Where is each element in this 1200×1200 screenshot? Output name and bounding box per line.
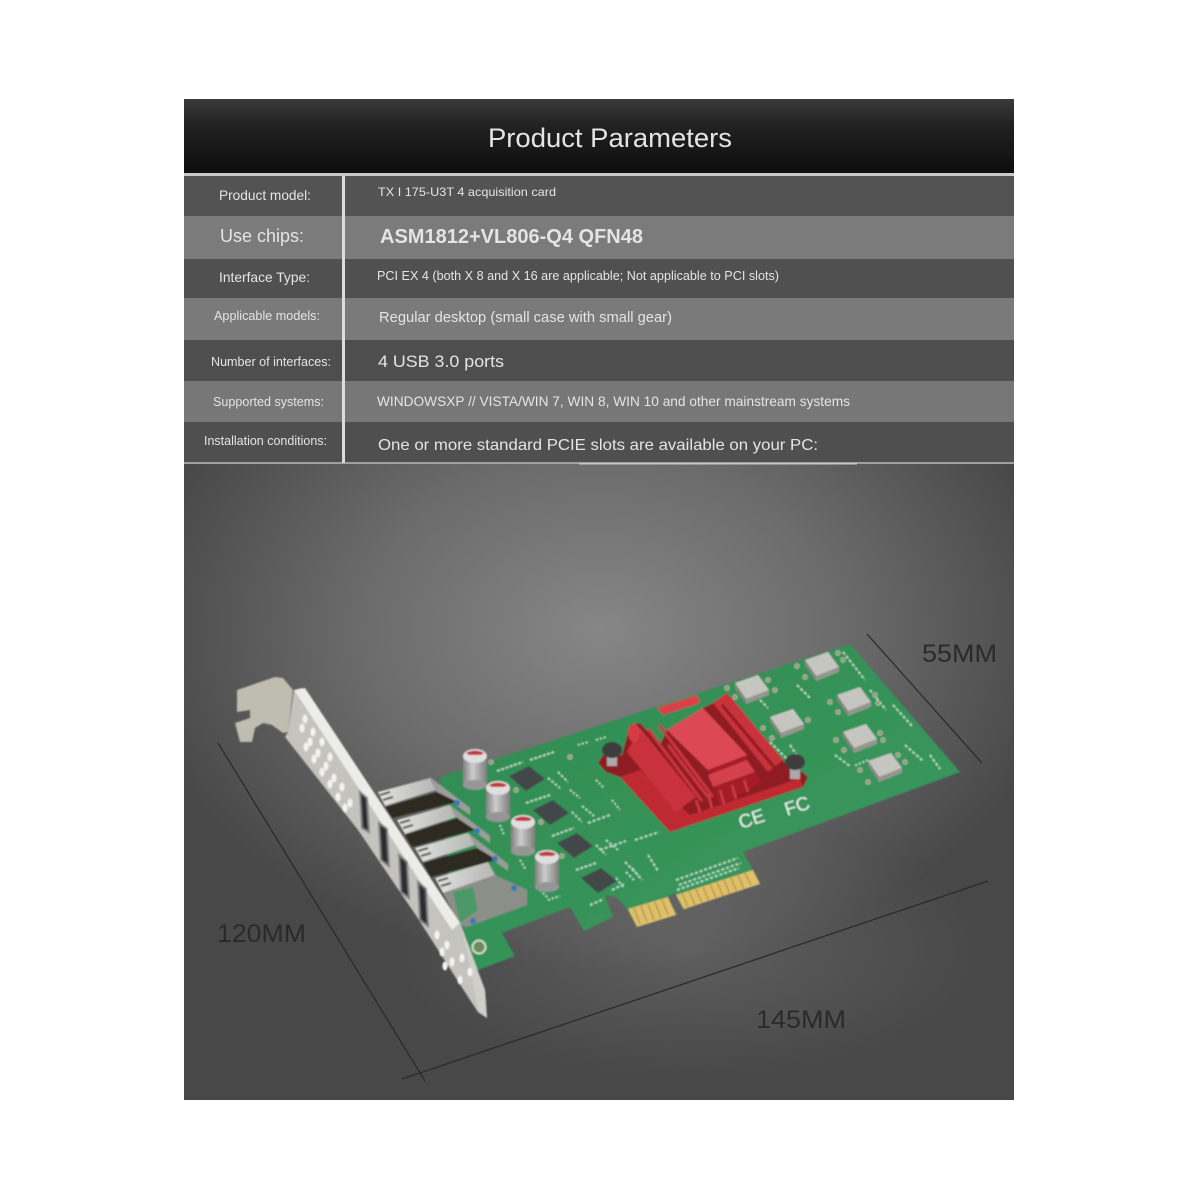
- title: Product Parameters: [488, 123, 732, 153]
- row: supported systems: Supported systems:: [213, 394, 324, 409]
- row: installation conditions: Installation conditions:: [204, 433, 327, 448]
- logos: CE and FCC: [736, 793, 813, 834]
- bracket mounting screw: [472, 940, 486, 954]
- row: supported systems: WINDOWSXP // VISTA/WIN 7, WIN 8, WIN 10 and other mainstream systems: [377, 393, 850, 409]
- USB ports: [378, 777, 527, 927]
- row: interface type: [219, 268, 779, 285]
- row: product model: TX I 175-U3T 4 acquisition card: [378, 185, 556, 199]
- row: number of interfaces: 4 USB 3.0 ports: [378, 352, 504, 371]
- label: 120MM: 120MM: [217, 920, 306, 948]
- row: interface type: Interface Type:: [219, 269, 310, 285]
- row: installation conditions: One or more standard PCIE slots are available on your PC:: [378, 437, 818, 454]
- red heatsink: [598, 693, 808, 832]
- heatsink screws: [602, 742, 805, 779]
- row: applicable models: Applicable models:: [214, 308, 320, 323]
- logos: CE and FCC: CE: [736, 806, 768, 834]
- row: number of interfaces: [211, 352, 504, 371]
- dimension line: 120MM: [218, 743, 425, 1081]
- row: use chips: Use chips:: [220, 226, 304, 246]
- logos: CE and FCC: FC: [782, 793, 813, 821]
- dimension line: 55MM: [867, 634, 982, 763]
- capacitors: [463, 749, 559, 892]
- parameters table: [184, 173, 1014, 464]
- label: 55MM: 55MM: [922, 640, 997, 668]
- dimension line: 145MM: [402, 881, 988, 1079]
- page panel background: [184, 99, 1014, 1100]
- label: 145MM: 145MM: [756, 1006, 846, 1034]
- circuit board: [440, 644, 960, 970]
- row: number of interfaces: Number of interfaces:: [211, 354, 331, 369]
- metal bracket: [235, 677, 487, 1018]
- inductors: [735, 652, 902, 782]
- row: product model: [219, 185, 556, 203]
- row: applicable models: Regular desktop (small case with small gear): [379, 309, 672, 326]
- title bar: [184, 99, 1014, 173]
- row: installation conditions: [204, 433, 818, 454]
- USB card illustration: [235, 644, 960, 1018]
- solder pads: [489, 651, 907, 858]
- row: product model: Product model:: [219, 187, 311, 203]
- row: use chips: [220, 226, 643, 248]
- chips: [509, 766, 617, 893]
- gold fingers: [628, 858, 760, 927]
- row: interface type: PCI EX 4 (both X 8 and X 16 are applicable; Not applicable to PCI slots): [377, 268, 779, 283]
- silkscreen and small components: [497, 652, 940, 905]
- row: applicable models: [214, 308, 672, 326]
- row: use chips: ASM1812+VL806-Q4 QFN48: [380, 226, 643, 248]
